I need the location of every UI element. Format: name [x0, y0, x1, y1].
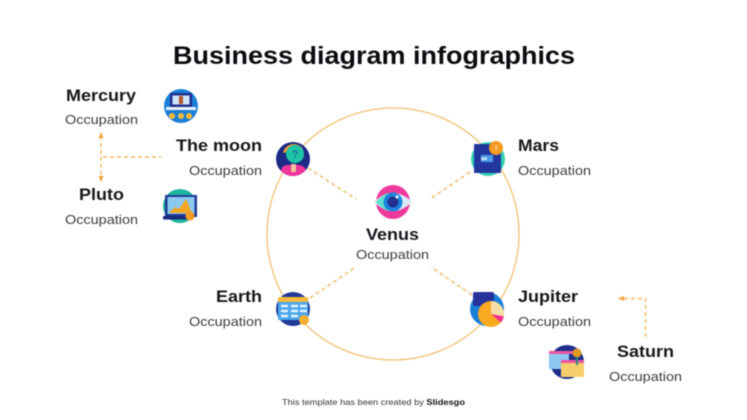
Saturn label: Saturn — [617, 342, 674, 361]
Jupiter label — [518, 287, 591, 329]
Pluto label — [65, 185, 138, 227]
icon: Pluto laptop chart — [163, 189, 197, 223]
The moon label: Occupation — [189, 163, 262, 178]
icon: The moon person with question: ? — [292, 149, 299, 161]
Venus label: Venus — [366, 225, 419, 244]
ring connecting the outer icons — [267, 108, 519, 360]
Earth label: Occupation — [189, 314, 262, 329]
The moon label — [176, 136, 262, 178]
Pluto label: Pluto — [79, 185, 124, 204]
Mercury label: Mercury — [66, 86, 137, 105]
icon: The moon person with question — [276, 142, 310, 180]
Earth label — [189, 287, 262, 329]
icon: Mars safe with badge — [471, 141, 505, 176]
icon: Venus eye — [376, 185, 410, 219]
dashed connectors to Venus — [308, 168, 472, 298]
icon: Earth calendar — [276, 292, 310, 326]
arrow: Saturn to Jupiter — [618, 296, 646, 337]
Saturn label: Occupation — [609, 369, 682, 384]
Venus label: Occupation — [356, 247, 429, 262]
Venus label — [356, 225, 429, 262]
Mercury label: Occupation — [65, 112, 138, 127]
Mars label: Occupation — [518, 163, 591, 178]
Mercury label — [65, 86, 138, 127]
Mars label: Mars — [518, 136, 559, 155]
arrow: Mercury and Pluto to The moon — [98, 132, 161, 182]
Jupiter label: Occupation — [518, 314, 591, 329]
Mars label — [518, 136, 591, 178]
icon: Jupiter pie chart — [470, 292, 504, 327]
title: Business diagram infographics — [173, 42, 575, 70]
footer credit: This template has been created by Slidesgo — [282, 397, 465, 407]
Saturn label — [609, 342, 682, 384]
Pluto label: Occupation — [65, 212, 138, 227]
Earth label: Earth — [216, 287, 262, 306]
The moon label: The moon — [176, 136, 262, 155]
Jupiter label: Jupiter — [518, 287, 578, 306]
icon: Saturn windows — [549, 345, 584, 379]
icon: Mercury monitor — [164, 89, 198, 123]
